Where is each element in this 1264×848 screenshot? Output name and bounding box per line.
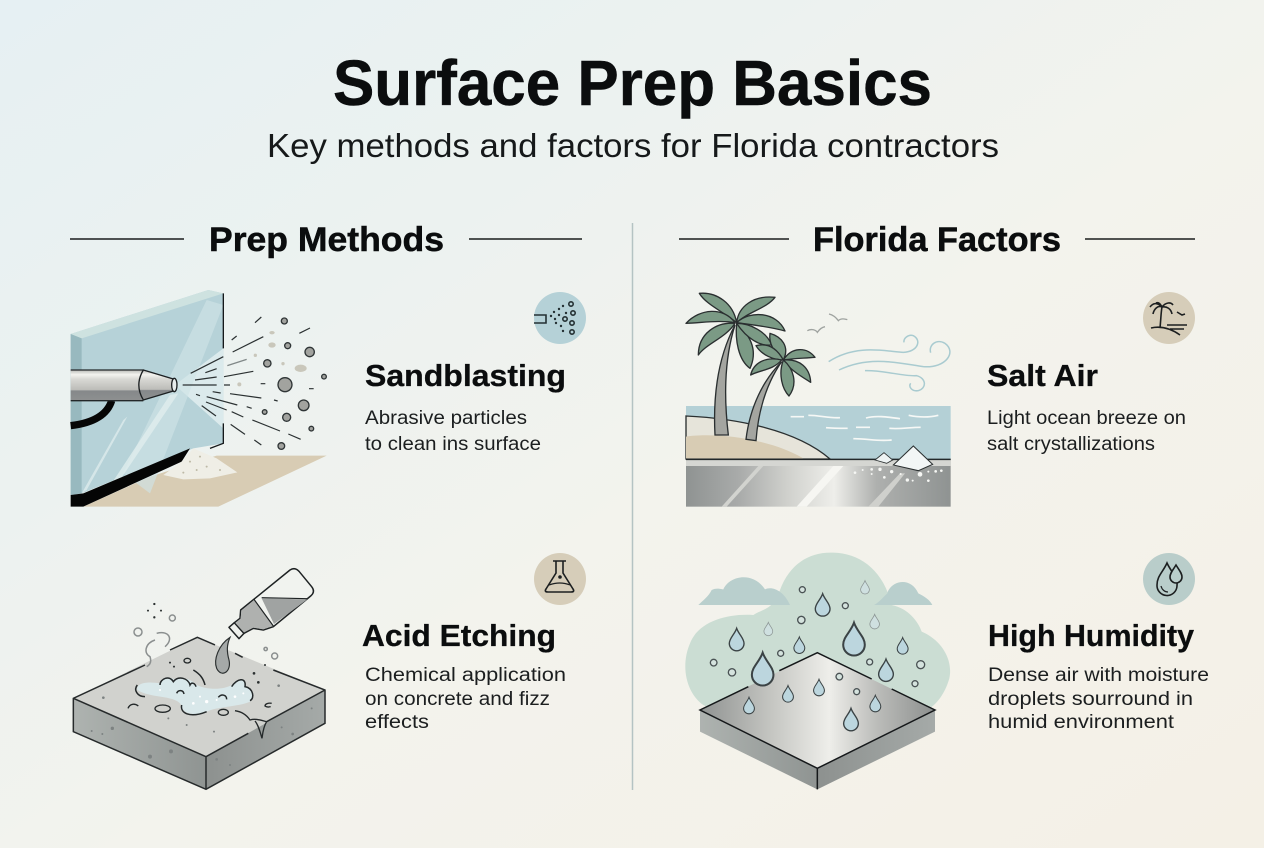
text: salt air [987, 358, 1186, 455]
text: acid etching: on concrete and fizz [365, 689, 550, 710]
icon: palm beach [1143, 292, 1195, 344]
text: acid etching: Chemical application [365, 665, 566, 686]
text: sandblasting: Abrasive particles [365, 408, 527, 429]
text: salt air: salt crystallizations [987, 434, 1155, 455]
text: sandblasting [365, 358, 566, 455]
icon: flask [534, 553, 586, 605]
illustration: high humidity [685, 553, 950, 789]
text: high humidity: humid environment [988, 712, 1175, 733]
heading: prep methods: Prep Methods [209, 221, 444, 259]
text: acid etching [362, 618, 566, 733]
text: high humidity [988, 618, 1209, 733]
panel: florida factors [679, 221, 1209, 789]
text: sandblasting: to clean ins surface [365, 434, 541, 455]
text: high humidity: Dense air with moisture [988, 665, 1209, 686]
heading: florida factors: Florida Factors [813, 221, 1061, 259]
illustration: sandblasting [71, 290, 327, 507]
text: sandblasting: Sandblasting [365, 358, 566, 393]
text: salt air: Salt Air [987, 358, 1098, 393]
title: Surface Prep Basics [333, 47, 932, 119]
header [267, 47, 999, 164]
text: acid etching: effects [365, 712, 429, 733]
subtitle: Key methods and factors for Florida contractors [267, 127, 999, 164]
text: high humidity: High Humidity [988, 618, 1195, 653]
center divider [632, 223, 634, 790]
illustration: salt air [686, 293, 951, 507]
text: acid etching: Acid Etching [362, 618, 556, 653]
text: salt air: Light ocean breeze on [987, 408, 1186, 429]
panel: prep methods [70, 221, 586, 789]
icon: sandblast nozzle [534, 292, 586, 344]
illustration: acid etching [73, 569, 325, 789]
text: high humidity: droplets sourround in [988, 689, 1193, 710]
icon: water drops [1143, 553, 1195, 605]
